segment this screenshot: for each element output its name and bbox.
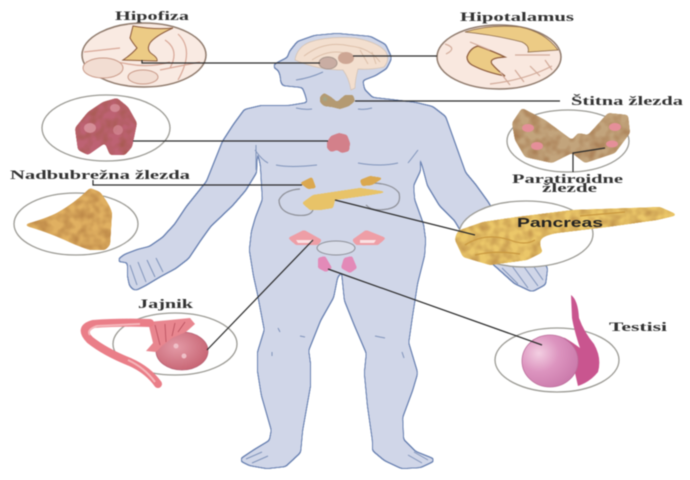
label: Testisi: Testisi <box>609 320 668 334</box>
brain in head <box>295 38 388 90</box>
leader: ovary <box>207 240 313 350</box>
human body silhouette <box>117 34 547 468</box>
leader: hipofiza <box>142 60 320 63</box>
label: Štitna žlezda: Štitna žlezda <box>571 94 684 108</box>
kidney outlines <box>279 183 400 215</box>
thyroid small in neck <box>320 93 355 109</box>
label: Paratiroidne žlezde: žlezde <box>542 181 598 195</box>
panel: ovary circle <box>85 313 237 384</box>
testes small <box>318 256 357 273</box>
label: Jajnik: Jajnik <box>138 297 193 311</box>
label: Paratiroidne žlezde <box>512 172 624 195</box>
panel: hypothalamus circle <box>437 25 561 89</box>
leader: adrenal <box>93 180 302 185</box>
panel: pancreas circle <box>455 201 678 267</box>
panel: testis circle <box>495 295 619 392</box>
label: Hipofiza: Hipofiza <box>115 9 190 23</box>
hypothalamus small in head <box>338 52 354 64</box>
leader: hipotalamus <box>353 55 437 57</box>
panel: thymus circle <box>42 95 170 161</box>
leader: testis <box>328 269 542 345</box>
panel: adrenal circle <box>14 188 138 255</box>
ovaries and uterus small <box>288 230 386 255</box>
label: Pancreas: Pancreas <box>517 215 603 230</box>
adrenal glands small <box>300 176 383 189</box>
leader: thyroid <box>355 100 560 102</box>
label: Paratiroidne žlezde: Paratiroidne <box>512 172 624 186</box>
thymus small in chest <box>327 133 350 153</box>
label: Nadbubrežna žlezda: Nadbubrežna žlezda <box>10 168 191 182</box>
label: Hipotalamus: Hipotalamus <box>460 10 574 24</box>
panel: thyroid and parathyroid circle <box>507 108 630 172</box>
pituitary small in head <box>319 57 337 69</box>
leader: parathyroid <box>573 148 605 172</box>
panel: pituitary circle <box>82 23 206 87</box>
leader: thymus <box>133 140 328 142</box>
leader: pancreas <box>335 200 475 235</box>
pancreas small <box>302 188 388 210</box>
